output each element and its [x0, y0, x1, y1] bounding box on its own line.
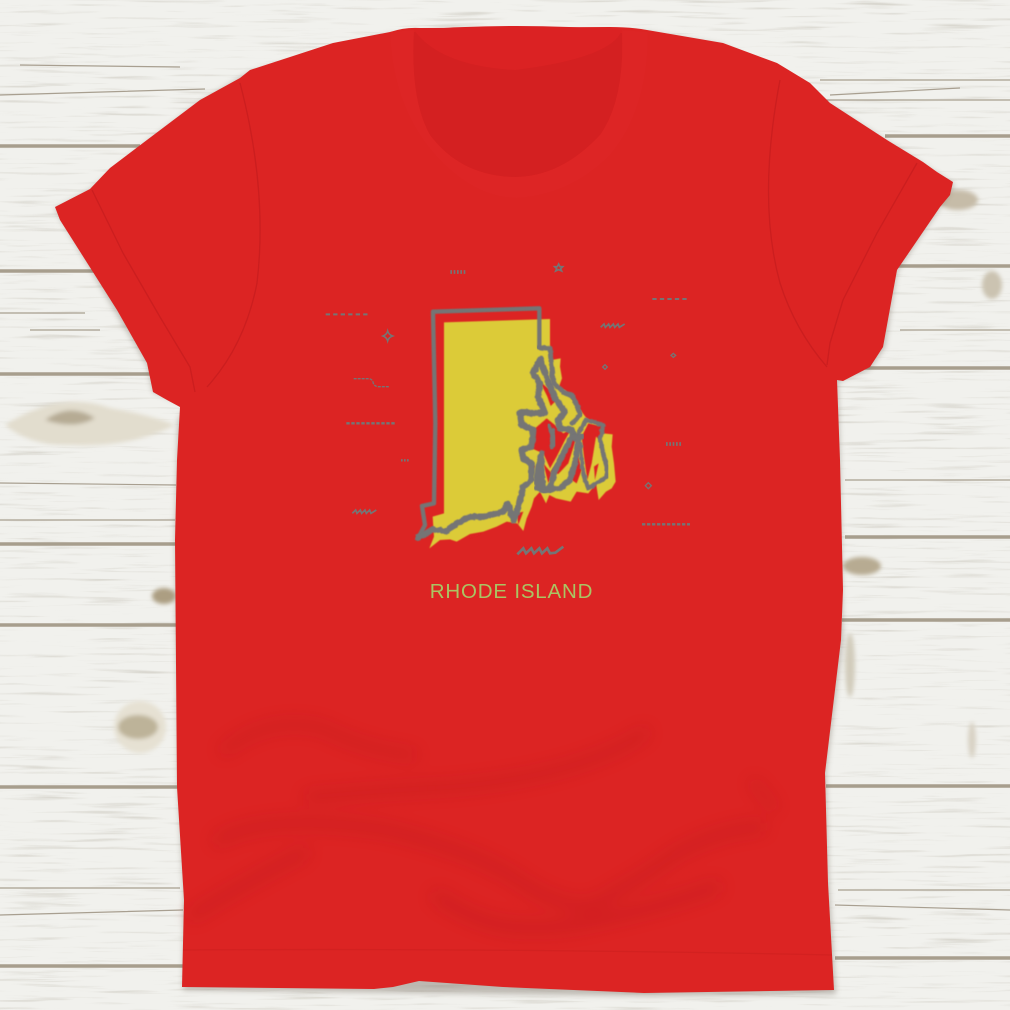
coast and bay	[418, 358, 575, 538]
red inlets showing through	[470, 382, 603, 538]
zigzags	[601, 324, 625, 327]
diamonds and star	[383, 331, 393, 341]
back collar band	[414, 26, 622, 70]
dashes left middle	[346, 420, 395, 427]
title: RHODE ISLAND	[430, 580, 593, 603]
front collar	[390, 30, 648, 198]
dashes left top	[326, 311, 369, 317]
inner back neck	[413, 27, 622, 177]
chevron rows	[450, 266, 466, 277]
print artwork, coordinates in 3x grid	[326, 264, 690, 554]
state map: grey outline	[418, 308, 607, 538]
dashes right bottom	[642, 521, 690, 528]
state map: yellow fill	[429, 319, 616, 548]
straight border	[418, 308, 539, 538]
dashes right top	[652, 296, 687, 302]
wrinkles	[193, 724, 773, 928]
sleeve seams	[92, 80, 917, 955]
decorative marks	[326, 264, 690, 554]
short dots	[401, 457, 409, 464]
stepped dashed line	[354, 379, 389, 387]
